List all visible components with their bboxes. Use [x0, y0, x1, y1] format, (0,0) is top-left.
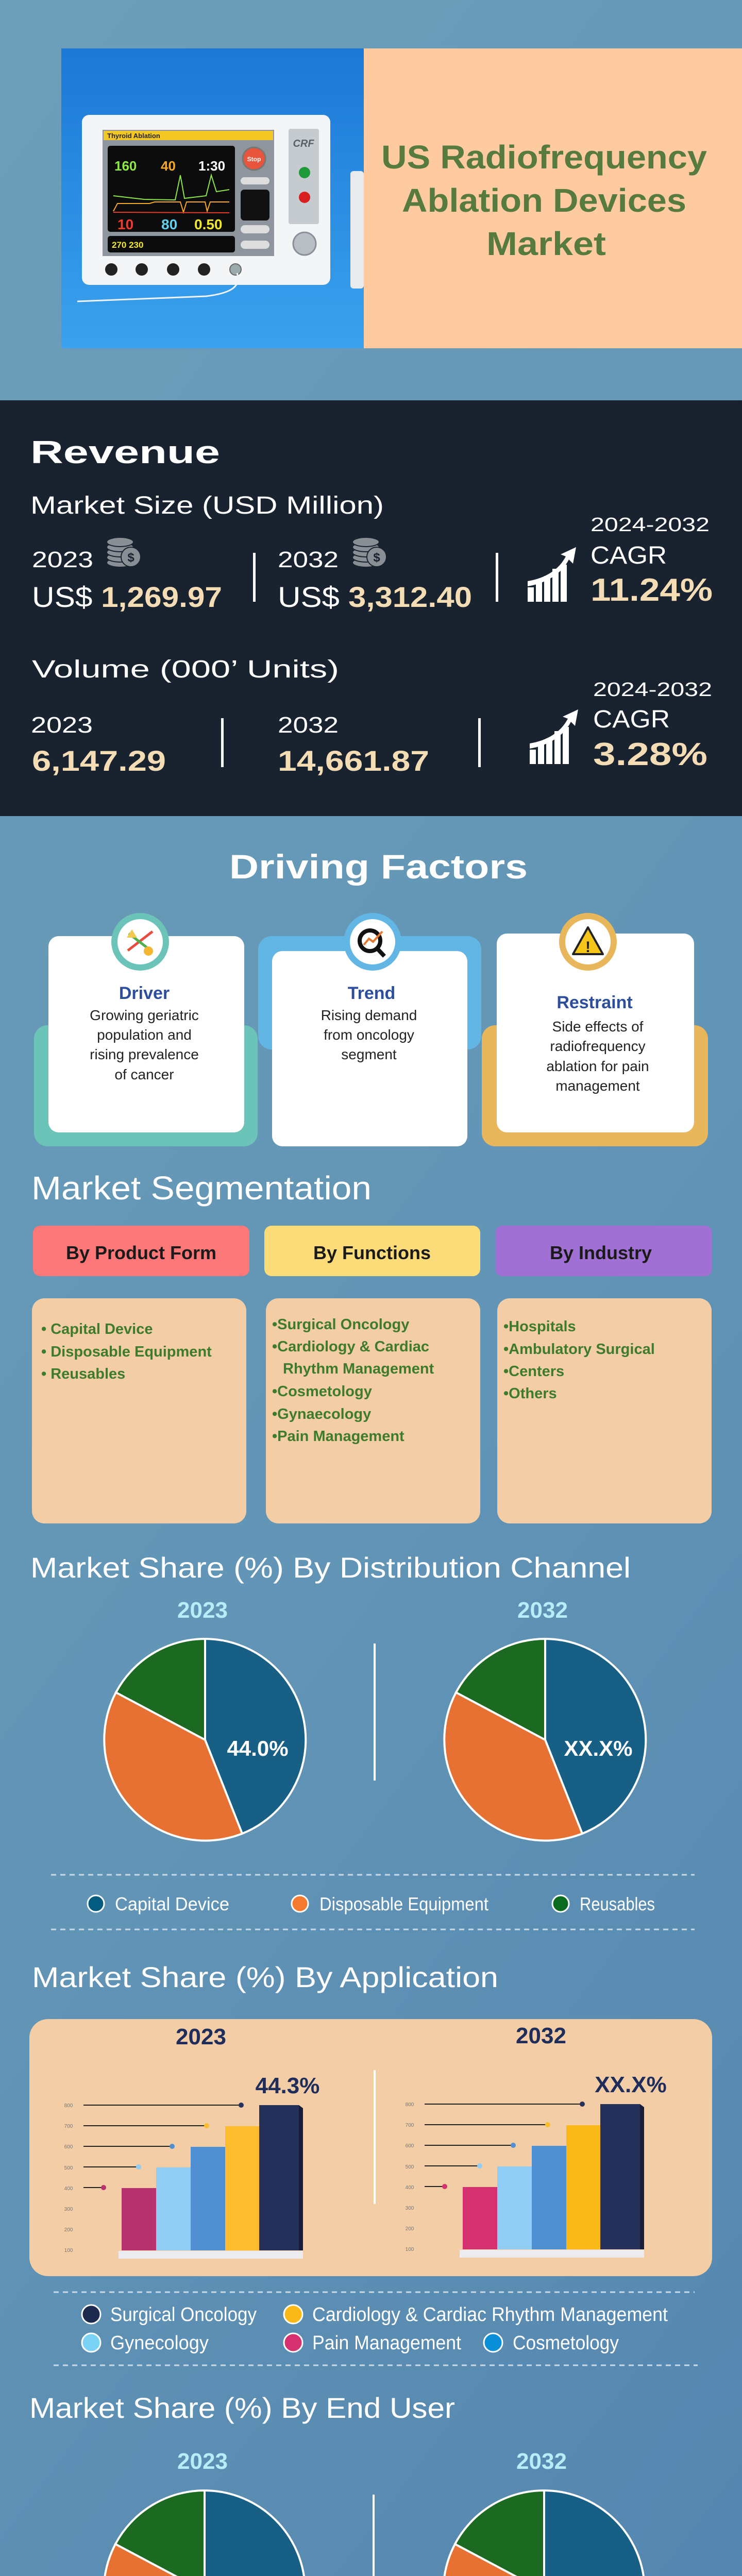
panel: by industry: By Industry	[550, 1242, 652, 1263]
header: title panel: US Radiofrequency	[381, 139, 707, 176]
panel: restraint card: Side effects of	[552, 1019, 644, 1035]
panel: by industry: •Hospitals	[503, 1318, 576, 1335]
heading: application: Market Share (%) By Application	[32, 1961, 498, 1993]
panel: driver card	[34, 913, 258, 1146]
panel: by industry: •Others	[503, 1385, 557, 1402]
icon: coins: $	[127, 551, 134, 565]
heading: end user: Market Share (%) By End User	[29, 2392, 455, 2424]
panel: trend card: Trend	[348, 984, 395, 1003]
panel: driver card: population and	[97, 1027, 192, 1043]
stat: 2032 market size	[278, 547, 472, 613]
chart: end user 2023 pie	[104, 2449, 305, 2576]
header: product image: 80	[161, 216, 177, 232]
subheading: market size: Market Size (USD Million)	[30, 492, 384, 519]
icon: growth chart	[528, 547, 576, 602]
chart: application 2032: 700	[406, 2123, 414, 2128]
panel: revenue	[0, 400, 742, 816]
panel: by industry: •Ambulatory Surgical	[503, 1341, 655, 1358]
panel: by industry: •Centers	[503, 1363, 564, 1380]
stat: volume CAGR: CAGR	[593, 706, 670, 733]
chart: distribution 2023 pie: 2023	[177, 1598, 228, 1623]
panel: by functions: •Cosmetology	[272, 1383, 372, 1400]
stat: 2032 volume: 14,661.87	[278, 744, 429, 777]
stat: 2023 market size: 2023	[32, 547, 93, 572]
legend: distribution: Capital Device	[115, 1893, 229, 1914]
chart: application 2023: 44.3%	[256, 2073, 319, 2098]
chart: distribution 2032 pie: 2032	[517, 1598, 568, 1623]
heading: distribution channel: Market Share (%) By Distribution Channel	[30, 1551, 631, 1584]
legend: application	[82, 2304, 668, 2354]
header: product image: 40	[161, 158, 176, 174]
icon: warning: !	[585, 939, 591, 956]
chart: application 2023: 100	[64, 2248, 73, 2253]
chart: application 2023: 700	[64, 2124, 73, 2129]
legend: distribution: Reusables	[580, 1893, 655, 1914]
panel: driver card: Growing geriatric	[90, 1007, 199, 1023]
icon: warning	[559, 913, 617, 971]
stat: 2023 market size	[32, 547, 222, 613]
legend: application: Surgical Oncology	[110, 2304, 257, 2326]
panel: trend card	[258, 913, 481, 1146]
chart: end user 2032 pie	[443, 2449, 645, 2576]
header: product image: 270 230	[112, 240, 143, 250]
stat: volume CAGR	[593, 679, 712, 772]
chart: application 2023	[64, 2024, 319, 2259]
chart: application 2032: 500	[406, 2164, 414, 2170]
header: title panel: Ablation Devices	[402, 182, 686, 219]
header: product image: 160	[114, 158, 137, 174]
panel: by functions: Rhythm Management	[283, 1361, 434, 1377]
heading: market segmentation: Market Segmentation	[31, 1170, 372, 1207]
header: product image: 1:30	[198, 158, 225, 174]
chart: distribution 2032 pie: XX.X%	[564, 1736, 633, 1760]
icon: coins	[352, 537, 386, 567]
panel: application bar charts	[29, 2019, 712, 2276]
chart: application 2032: 600	[406, 2143, 414, 2149]
header: product image: Thyroid Ablation	[107, 132, 160, 140]
icon: coins	[107, 537, 141, 567]
icon: coins: $	[373, 551, 380, 565]
chart: distribution 2032 pie	[444, 1598, 646, 1841]
stat: 2023 volume: 6,147.29	[32, 744, 166, 777]
legend: distribution	[88, 1893, 655, 1914]
header: product image: 10	[117, 216, 133, 232]
chart: end user 2032 pie: 2032	[516, 2449, 567, 2474]
header: product image: CRF	[293, 138, 314, 149]
legend: distribution: Disposable Equipment	[319, 1893, 488, 1914]
panel: driver card: Driver	[119, 984, 170, 1003]
legend: application: Cardiology & Cardiac Rhythm Management	[312, 2304, 668, 2326]
stat: 2023 volume: 2023	[31, 713, 93, 738]
chart: application 2032	[406, 2023, 667, 2258]
icon: driver	[111, 913, 169, 971]
header: title panel	[364, 48, 742, 348]
heading: driving factors: Driving Factors	[229, 848, 528, 886]
stat: revenue CAGR: 2024-2032	[591, 514, 710, 536]
chart: application 2023: 200	[64, 2227, 73, 2233]
chart: application 2023: 300	[64, 2207, 73, 2212]
panel: by product form: • Disposable Equipment	[41, 1344, 212, 1360]
header: product image	[61, 48, 364, 348]
panel: driver card: rising prevalence	[90, 1046, 199, 1062]
panel: trend card: Rising demand	[321, 1007, 417, 1023]
panel: by functions: •Pain Management	[272, 1428, 404, 1445]
chart: distribution 2023 pie: 44.0%	[227, 1736, 289, 1760]
panel: by product form	[32, 1226, 249, 1523]
header: title panel: Market	[486, 225, 606, 262]
header: product image: 0.50	[194, 216, 223, 232]
chart: application 2032: 100	[406, 2247, 414, 2252]
legend: application: Cosmetology	[513, 2332, 619, 2354]
panel: by functions: •Cardiology & Cardiac	[272, 1338, 429, 1355]
chart: application 2032: 800	[406, 2102, 414, 2108]
chart: application 2032: 400	[406, 2185, 414, 2191]
chart: application 2023: 2023	[176, 2024, 226, 2049]
stat: revenue CAGR	[591, 514, 713, 608]
chart: application 2023: 600	[64, 2144, 73, 2150]
panel: restraint card: management	[555, 1078, 640, 1094]
chart: application 2023: 400	[64, 2186, 73, 2192]
stat: 2032 volume	[278, 713, 429, 777]
stat: 2023 market size: US$ 1,269.97	[32, 581, 222, 613]
panel: restraint card	[482, 913, 708, 1146]
panel: by functions: •Surgical Oncology	[272, 1316, 409, 1333]
stat: 2032 market size: US$ 3,312.40	[278, 581, 472, 613]
panel: driver card: of cancer	[114, 1066, 174, 1082]
chart: application 2032: 200	[406, 2226, 414, 2232]
chart: application 2032: 2032	[516, 2023, 566, 2048]
chart: application 2032: XX.X%	[595, 2072, 667, 2097]
header: product image: Stop	[247, 156, 261, 163]
heading: revenue: Revenue	[30, 435, 220, 470]
panel: restraint card: ablation for pain	[546, 1058, 649, 1074]
panel: trend card: segment	[341, 1046, 397, 1062]
panel: restraint card: radiofrequency	[550, 1038, 646, 1054]
subheading: volume: Volume (000’ Units)	[32, 656, 339, 683]
legend: application: Pain Management	[312, 2332, 461, 2354]
panel: trend card: from oncology	[324, 1027, 414, 1043]
chart: application 2032: 300	[406, 2206, 414, 2211]
stat: volume CAGR: 2024-2032	[593, 679, 712, 701]
chart: distribution 2023 pie	[104, 1598, 306, 1841]
stat: 2032 volume: 2032	[278, 713, 339, 738]
icon: trend	[344, 913, 401, 971]
panel: by industry	[495, 1226, 712, 1523]
stat: 2023 volume	[31, 713, 166, 777]
panel: by product form: • Reusables	[41, 1366, 125, 1382]
chart: application 2023: 500	[64, 2165, 73, 2171]
chart: end user 2023 pie: 2023	[177, 2449, 228, 2474]
stat: 2032 market size: 2032	[278, 547, 339, 572]
panel: by functions	[264, 1226, 480, 1523]
legend: application: Gynecology	[110, 2332, 209, 2354]
icon: growth chart	[530, 709, 578, 764]
panel: by product form: By Product Form	[66, 1242, 216, 1263]
panel: by product form: • Capital Device	[41, 1321, 153, 1337]
stat: revenue CAGR: 11.24%	[591, 572, 713, 608]
chart: application 2023: 800	[64, 2103, 73, 2109]
panel: by functions: By Functions	[313, 1242, 431, 1263]
stat: volume CAGR: 3.28%	[593, 737, 707, 772]
panel: by functions: •Gynaecology	[272, 1406, 371, 1422]
stat: revenue CAGR: CAGR	[591, 542, 667, 569]
panel: restraint card: Restraint	[556, 993, 633, 1012]
